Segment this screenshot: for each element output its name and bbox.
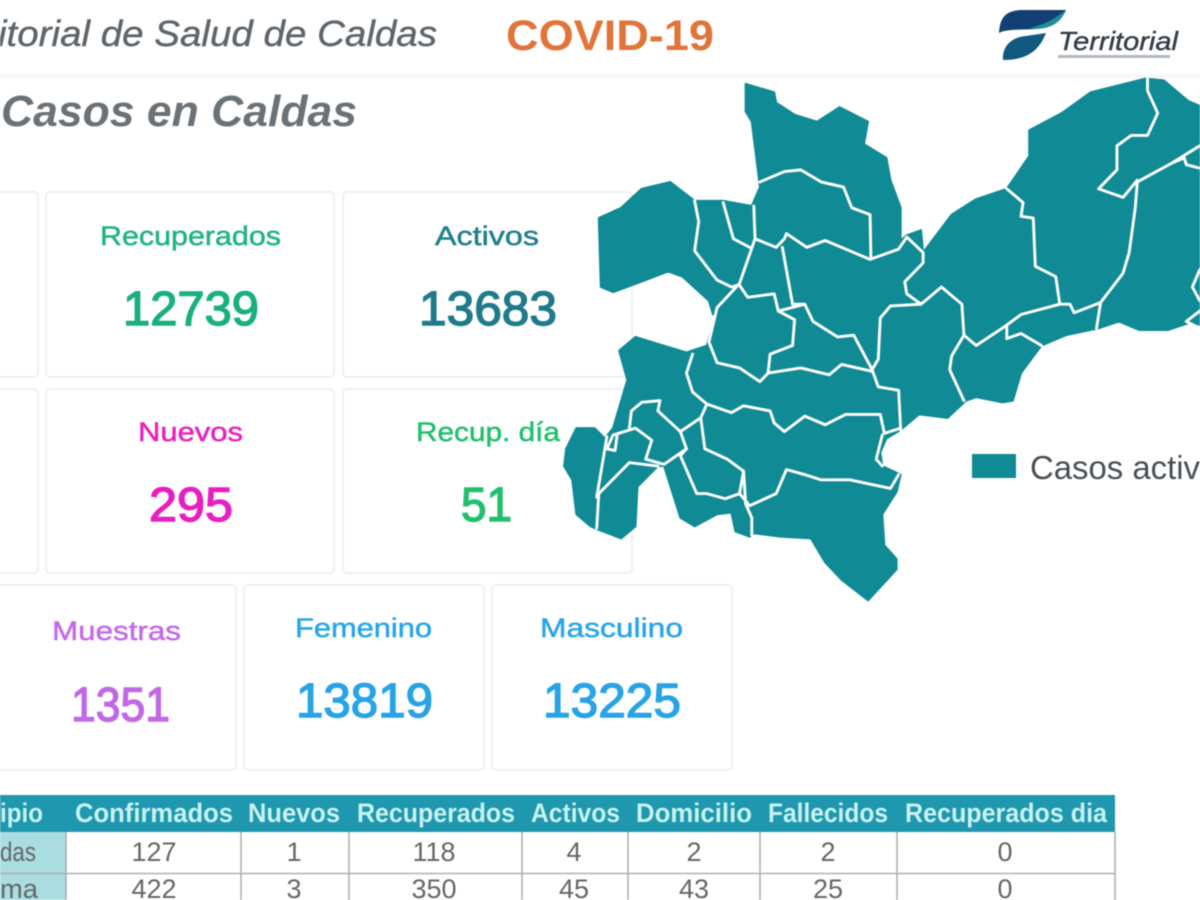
- table row 1: 118: [412, 837, 456, 867]
- table header row: [0, 795, 1115, 832]
- table header row: Domicilio: [636, 798, 752, 828]
- panel: Activos: 13683: [419, 283, 557, 336]
- panel: Recuperados: [46, 192, 334, 377]
- table header row: Activos: [531, 798, 620, 828]
- panel: Recuperados: Recuperados: [100, 221, 281, 251]
- panel: Recuperados: 12739: [123, 283, 259, 336]
- panel: Nuevos: 295: [149, 479, 233, 532]
- panel: Recup. día: Recup. día: [416, 417, 561, 447]
- panel: Activos: [343, 192, 632, 377]
- heading: COVID-19: COVID-19: [506, 12, 714, 60]
- table row 1: 0: [997, 837, 1013, 867]
- logo: Territorial: Territorial: [1058, 26, 1179, 56]
- panel: Activos: Activos: [435, 221, 539, 251]
- panel: Recup. día: [343, 389, 632, 573]
- panel: Muestras: 1351: [71, 679, 170, 732]
- table row 1: 2: [820, 837, 836, 867]
- table header row: Recuperados dia: [905, 798, 1108, 828]
- table row 1: das: [0, 837, 36, 867]
- panel: Masculino: Masculino: [540, 613, 683, 643]
- panel: partial card row 2: [0, 389, 38, 573]
- table header row: Confirmados: [75, 798, 233, 828]
- table row 2: [0, 874, 1013, 900]
- heading: Casos en Caldas: Casos en Caldas: [1, 87, 357, 136]
- table row 1: 1: [286, 837, 302, 867]
- panel: Nuevos: Nuevos: [138, 417, 243, 447]
- panel: Recup. día: 51: [461, 479, 512, 532]
- table row 1: 127: [131, 837, 177, 867]
- panel: Nuevos: [46, 389, 334, 573]
- panel: Femenino: [244, 585, 484, 770]
- header band: [0, 0, 1200, 78]
- table header row: ipio: [0, 798, 43, 828]
- table header row: Nuevos: [248, 798, 340, 828]
- table row 1: 2: [686, 837, 702, 867]
- table header row: Recuperados: [357, 798, 515, 828]
- panel: Masculino: [492, 585, 732, 770]
- panel: Muestras: [0, 585, 236, 770]
- logo: Territorial: [999, 10, 1179, 60]
- table row 1: [0, 837, 1013, 867]
- table row 1: 4: [566, 837, 582, 867]
- panel: Muestras: Muestras: [52, 616, 181, 646]
- panel: Femenino: 13819: [296, 675, 433, 728]
- panel: Masculino: 13225: [543, 675, 681, 728]
- panel: partial card row 1: [0, 192, 38, 377]
- map legend: Casos activ: [1030, 449, 1200, 486]
- table grid: [0, 832, 1115, 900]
- map: municipalities of Caldas: [564, 79, 1200, 600]
- header title: itorial de Salud de Caldas: [0, 13, 437, 54]
- panel: Femenino: Femenino: [295, 613, 432, 643]
- table: [0, 795, 1115, 900]
- table header row: Fallecidos: [768, 798, 888, 828]
